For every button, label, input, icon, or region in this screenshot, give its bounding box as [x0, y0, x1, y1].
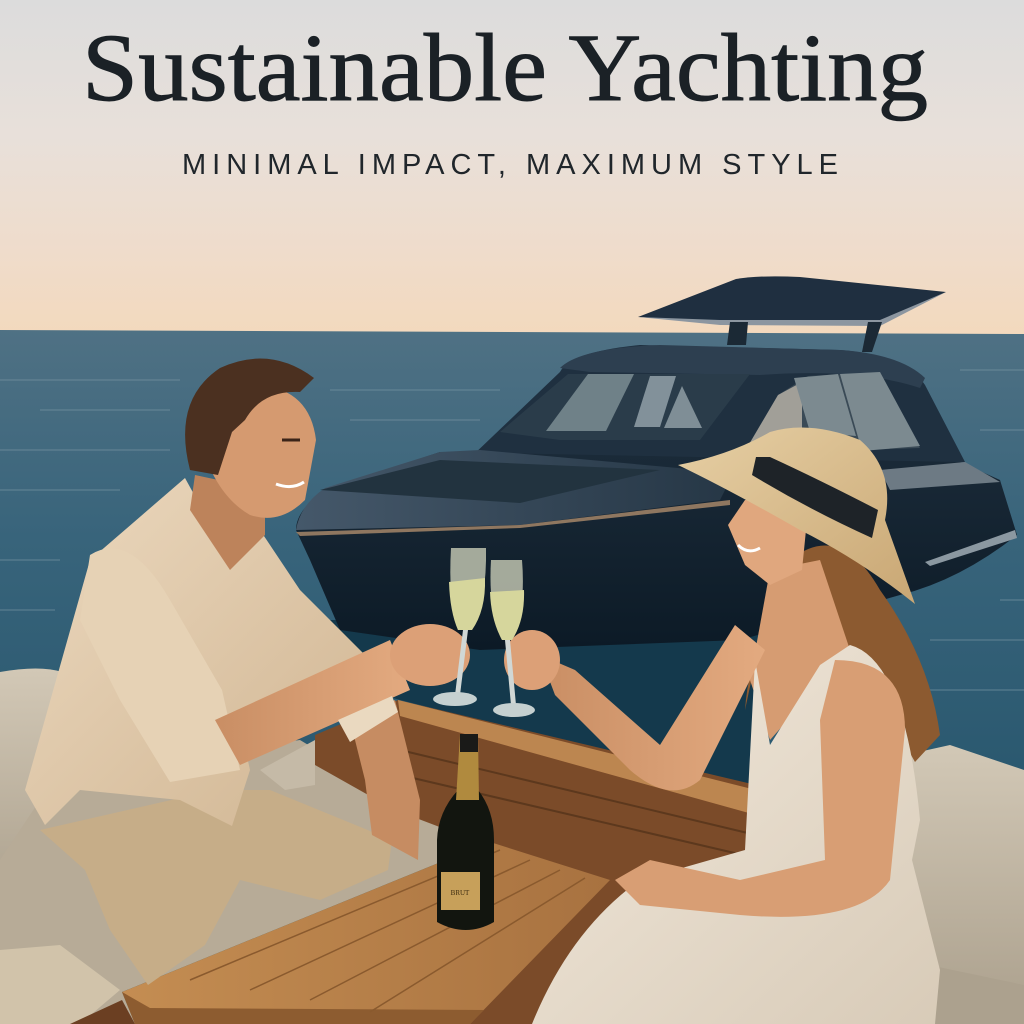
hand with glass — [504, 630, 560, 690]
right arm — [615, 660, 905, 917]
water reflection lines — [0, 370, 1024, 690]
hand holding glass — [390, 624, 470, 686]
hair — [745, 545, 940, 762]
subtitle: MINIMAL IMPACT, MAXIMUM STYLE — [182, 149, 838, 181]
woman — [504, 428, 940, 1024]
smile — [276, 482, 304, 487]
neck — [190, 475, 265, 570]
shirt cuff — [338, 696, 398, 742]
cabin — [470, 345, 965, 470]
head — [200, 385, 316, 518]
yacht — [296, 276, 1017, 790]
title: Sustainable Yachting — [82, 14, 928, 121]
seating sofa right — [905, 745, 1024, 1024]
left arm — [540, 625, 765, 790]
seating sofa left — [0, 668, 490, 1024]
glass left — [433, 548, 486, 706]
hull — [296, 452, 1017, 650]
torso shirt — [25, 478, 370, 826]
hat — [678, 428, 915, 604]
dark reflection under hull — [300, 620, 770, 790]
dress — [532, 645, 940, 1024]
sleeve — [80, 548, 240, 782]
wood strip under sofa — [70, 1000, 135, 1024]
lower arm and hand — [350, 700, 420, 860]
sky background — [0, 0, 1024, 336]
smile — [738, 545, 760, 551]
sea background — [0, 330, 1024, 1024]
trousers — [40, 790, 392, 985]
man — [25, 359, 470, 985]
eye — [282, 438, 300, 442]
teak rail — [315, 700, 756, 1024]
forearm — [215, 640, 410, 765]
foredeck — [296, 450, 730, 530]
solar panel roof — [638, 276, 946, 352]
champagne bottle: BRUT — [451, 889, 470, 897]
champagne bottle — [437, 734, 494, 930]
face — [728, 490, 810, 585]
neck and chest — [750, 560, 850, 740]
cabin windows — [500, 372, 920, 463]
glass right — [490, 560, 535, 717]
hair — [185, 359, 314, 475]
champagne glasses — [433, 548, 535, 717]
teak table — [122, 842, 610, 1024]
